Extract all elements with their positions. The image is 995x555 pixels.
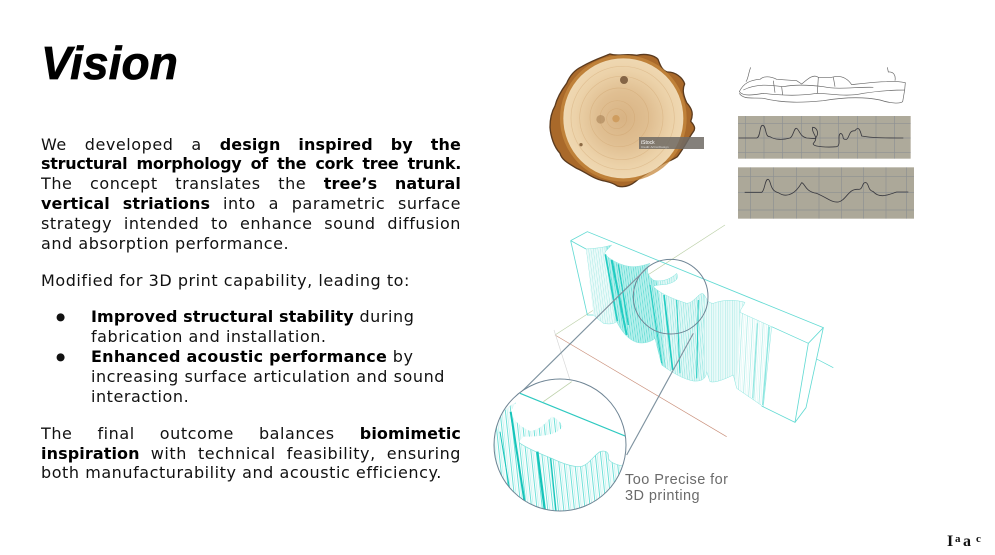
text block: intro paragraph: vertical striations into a parametric surface bbox=[41, 194, 461, 213]
wall outline bbox=[571, 232, 823, 422]
bullet: structural stability: Improved structural stability during bbox=[91, 307, 414, 326]
bullet: structural stability: ● bbox=[56, 311, 65, 323]
striated surface bbox=[586, 245, 770, 406]
text block: intro paragraph: and absorption performance. bbox=[41, 234, 289, 253]
bullet: acoustic performance bbox=[56, 347, 445, 406]
logo: IAAC: a bbox=[963, 533, 971, 550]
text block: conclusion: both manufacturability and acoustic efficiency. bbox=[41, 463, 442, 482]
logo: IAAC: a bbox=[955, 533, 961, 545]
text block: intro paragraph: We developed a design inspired by the bbox=[41, 135, 461, 154]
enlarged detail circle bbox=[494, 378, 626, 512]
photo: tree trunk cross-section bbox=[550, 54, 695, 187]
sketch: graph paper profile one bbox=[738, 116, 911, 159]
logo: IAAC: I bbox=[947, 533, 953, 550]
text block: conclusion: The final outcome balances biomimetic bbox=[41, 424, 461, 443]
diagram: 3D parametric wall model bbox=[478, 225, 833, 525]
bullet: acoustic performance: ● bbox=[56, 351, 65, 363]
sketch: graph paper profile two bbox=[738, 167, 914, 219]
annotation: too precise for 3D printing: Too Precise for bbox=[625, 472, 728, 488]
watermark on the tree photo: Credit: ArtCorDesign bbox=[641, 145, 669, 149]
logo: IAAC: c bbox=[976, 533, 981, 545]
watermark on the tree photo bbox=[639, 137, 704, 149]
bullet: acoustic performance: increasing surface articulation and sound bbox=[91, 367, 445, 386]
heavy striations bbox=[605, 254, 769, 405]
surface edge bbox=[586, 245, 772, 407]
watermark on the tree photo: iStock bbox=[641, 140, 655, 146]
text block: conclusion: inspiration with technical feasibility, ensuring bbox=[41, 444, 461, 463]
axes bbox=[554, 225, 833, 437]
text block: modification statement: Modified for 3D print capability, leading to: bbox=[41, 271, 410, 290]
logo: IAAC bbox=[947, 533, 981, 550]
text block: intro paragraph: strategy intended to enhance sound diffusion bbox=[41, 214, 461, 233]
bullet list: outcomes bbox=[56, 307, 445, 406]
text block: conclusion bbox=[41, 424, 461, 482]
small magnifier circle bbox=[633, 259, 708, 334]
text block: intro paragraph: structural morphology of the cork tree trunk. bbox=[41, 154, 461, 173]
bullet: acoustic performance: interaction. bbox=[91, 387, 189, 406]
annotation: too precise for 3D printing: 3D printing bbox=[625, 488, 700, 504]
text block: intro paragraph: The concept translates the tree’s natural bbox=[41, 174, 461, 193]
text block: intro paragraph bbox=[41, 135, 461, 253]
title: Vision bbox=[41, 37, 178, 89]
bullet: acoustic performance: Enhanced acoustic performance by bbox=[91, 347, 414, 366]
bullet: structural stability: fabrication and installation. bbox=[91, 327, 327, 346]
bullet: structural stability bbox=[56, 307, 414, 346]
annotation: too precise for 3D printing bbox=[625, 472, 728, 504]
sketch: cork outline drawing bbox=[739, 67, 905, 103]
magnifier connector lines bbox=[520, 268, 693, 455]
